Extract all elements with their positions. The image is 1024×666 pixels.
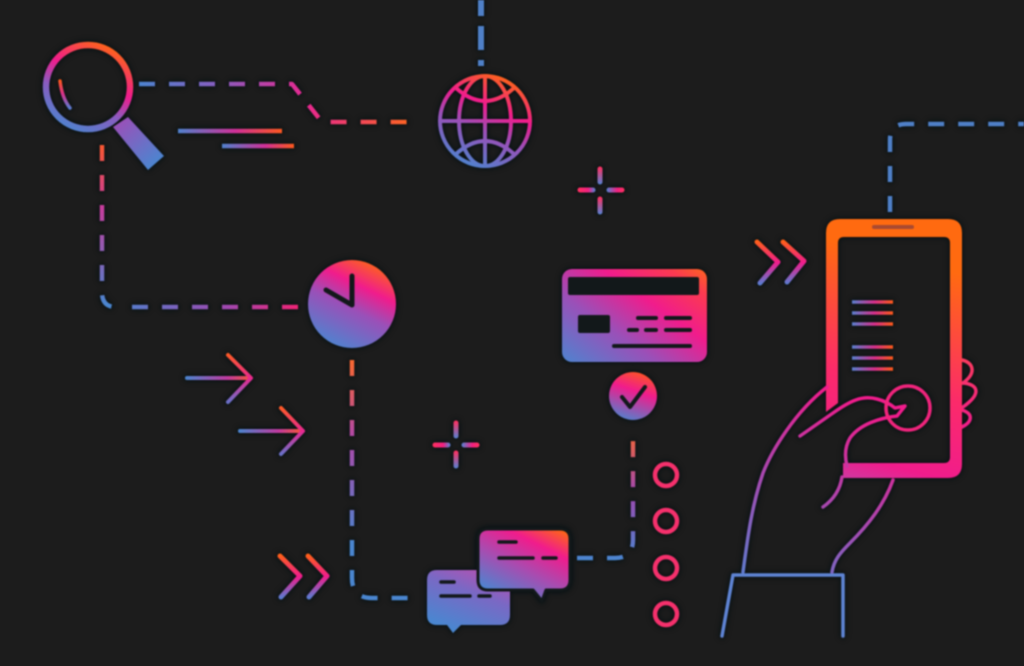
- dashed connector: top into globe: [478, 0, 484, 66]
- dashed connector: chat to check: [577, 428, 633, 558]
- dashed connector: magnifier to globe: [139, 84, 416, 122]
- back bubble: [427, 570, 510, 633]
- icon: chat bubbles: [427, 529, 570, 633]
- sparkle: upper: [580, 169, 622, 212]
- front bubble: [478, 529, 570, 601]
- dashed connector: phone to top right: [890, 124, 1024, 212]
- arrow: upper: [187, 355, 251, 402]
- dashed connector: magnifier to clock, horizontal run: [132, 305, 302, 309]
- chevrons: lower left: [280, 556, 327, 597]
- speed lines by magnifier: [178, 131, 294, 146]
- icon: smartphone: [826, 219, 962, 478]
- icon: clock: [308, 260, 396, 348]
- icon: globe: [440, 76, 530, 166]
- arrow: lower: [240, 408, 303, 454]
- icon: magnifying glass: [46, 45, 164, 170]
- icon: hand holding phone: [722, 386, 930, 636]
- sparkle: lower: [435, 423, 477, 466]
- icon: credit card: [562, 269, 707, 362]
- screen lines: [852, 302, 893, 369]
- dashed connector: magnifier to clock, vertical run: [102, 145, 116, 307]
- icon: check badge: [609, 372, 657, 420]
- icon: fingers behind phone: [962, 360, 976, 427]
- list of dots: [655, 464, 677, 625]
- dashed connector: clock to chat: [352, 360, 418, 598]
- chevrons: by phone: [757, 242, 804, 283]
